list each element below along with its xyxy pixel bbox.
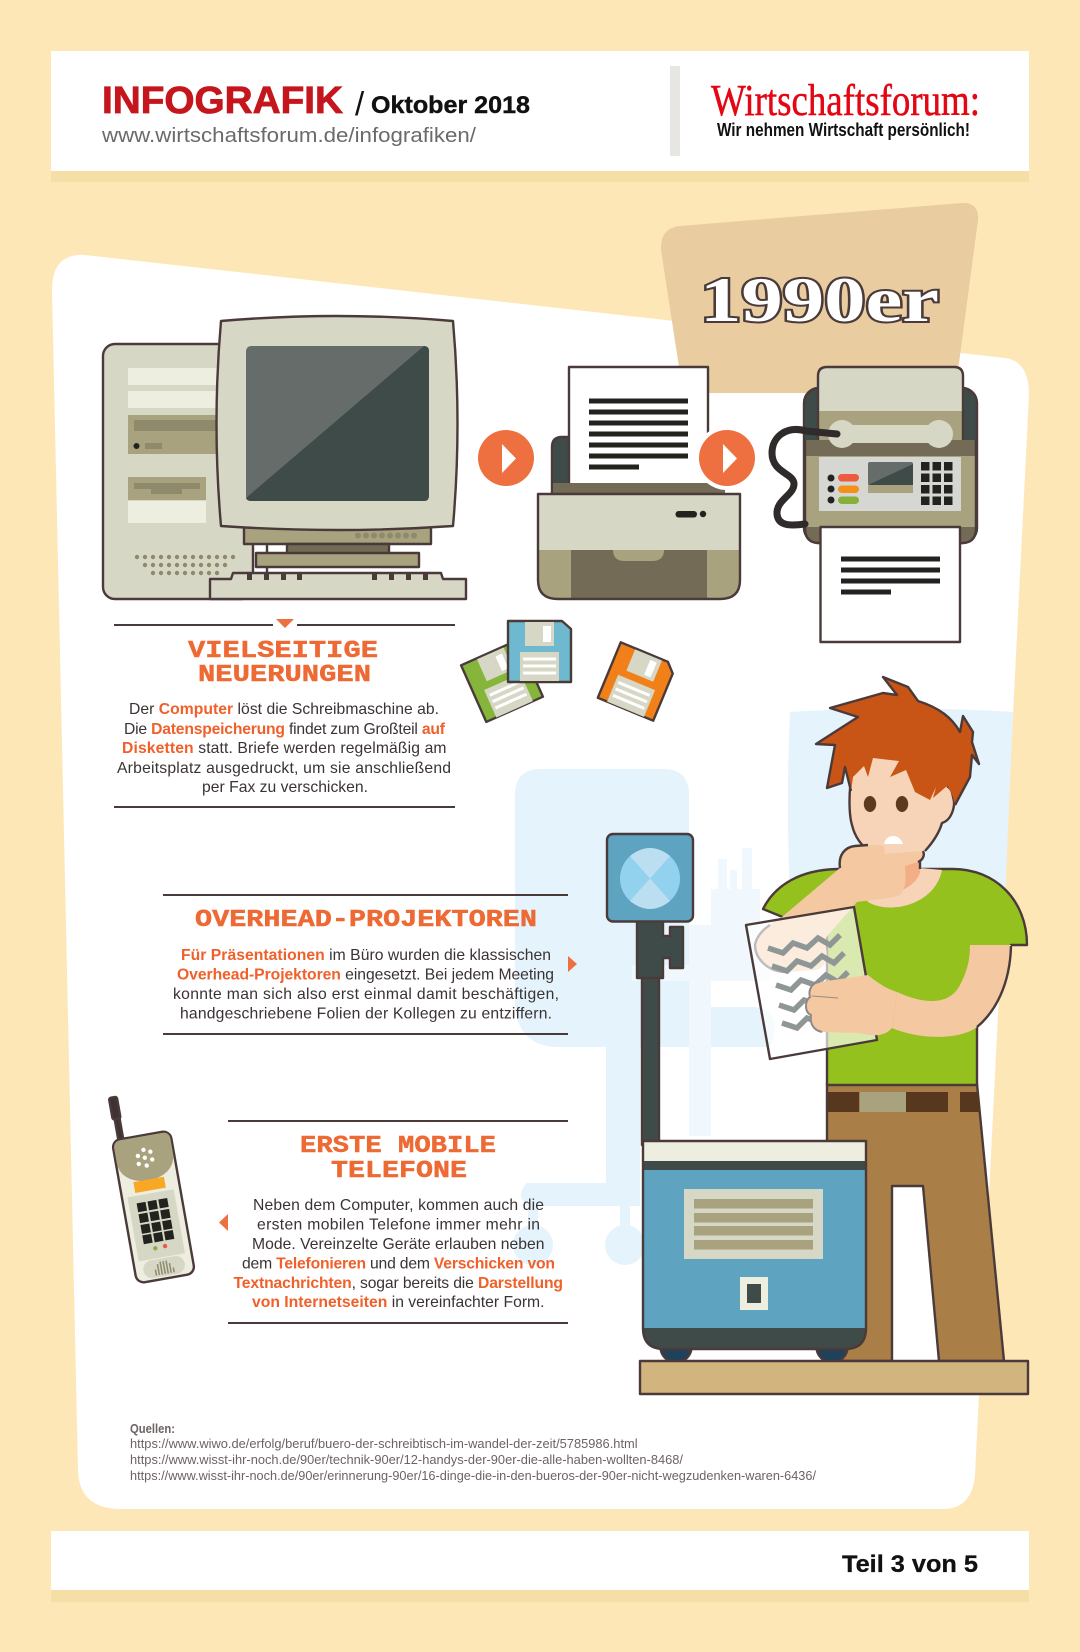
body text: von Internetseiten in vereinfachter Form. [252, 1294, 544, 1311]
head [850, 750, 954, 851]
wooden shelf [640, 1361, 1028, 1394]
era tab [661, 203, 978, 393]
arrow: computer to printer [478, 430, 534, 486]
arrow: printer to fax [695, 426, 759, 490]
overhead projector [607, 834, 866, 1362]
printer illustration [538, 367, 740, 599]
background silhouette: office chair and factory [513, 708, 1013, 1265]
heading: NEUERUNGEN [198, 662, 371, 689]
sources [130, 1421, 816, 1483]
printer body [538, 494, 740, 599]
main white panel [52, 255, 1029, 1509]
projector head [607, 834, 693, 922]
green floppy [461, 640, 543, 722]
icon: mobile phone [104, 1089, 195, 1284]
scribbles [768, 935, 848, 1028]
fax control panel [819, 457, 961, 511]
raised hand and forearm [755, 845, 924, 972]
heading: OVERHEAD-PROJEKTOREN [195, 907, 537, 934]
body text: konnte man sich also erst einmal damit beschäftigen, [173, 986, 559, 1003]
logo tagline: Wir nehmen Wirtschaft persönlich! [717, 119, 970, 140]
computer illustration [103, 316, 466, 599]
body text: per Fax zu verschicken. [202, 779, 368, 796]
heading [188, 638, 378, 689]
pointer down [276, 619, 294, 628]
heading [300, 1133, 496, 1185]
blue floppy [508, 621, 571, 682]
hand holding foil [806, 975, 897, 1035]
projector arm [637, 920, 683, 1145]
body text: Für Präsentationen im Büro wurden die klassischen [181, 947, 551, 964]
heading: VIELSEITIGE [188, 638, 378, 665]
footer banner [51, 1531, 1029, 1602]
sources: https://www.wisst-ihr-noch.de/90er/technik-90er/12-handys-der-90er-die-alle-haben-wollten-8468/ [130, 1452, 683, 1467]
orange floppy [598, 642, 676, 721]
hair [816, 677, 979, 805]
fax cover [818, 367, 963, 440]
header date slash: / [355, 85, 365, 122]
computer tower [103, 344, 253, 599]
projector vent [684, 1189, 823, 1259]
body text: Die Datenspeicherung findet zum Großteil auf [124, 721, 446, 738]
handwritten foil [746, 907, 877, 1059]
body text: Textnachrichten, sogar bereits die Darstellung [234, 1275, 563, 1292]
body text: Neben dem Computer, kommen auch die [253, 1197, 544, 1214]
body text: Overhead-Projektoren eingesetzt. Bei jedem Meeting [177, 966, 554, 984]
header banner [51, 51, 1029, 182]
section: vielseitige neuerungen [114, 619, 455, 807]
monitor [216, 316, 458, 530]
body text [173, 947, 559, 1022]
header date: Oktober 2018 [371, 92, 530, 119]
body text: Mode. Vereinzelte Geräte erlauben neben [252, 1236, 544, 1253]
heading: TELEFONE [331, 1158, 467, 1185]
mouth [884, 836, 903, 844]
monitor stand [244, 524, 431, 567]
logo wordmark: Wirtschaftsforum: [711, 76, 980, 125]
neck [855, 850, 942, 907]
body text: Der Computer löst die Schreibmaschine ab. [129, 701, 439, 718]
fax paper [820, 527, 960, 642]
era label: 1990er [700, 264, 939, 335]
body text: Disketten statt. Briefe werden regelmäßig am [122, 740, 446, 757]
fax cord [772, 430, 837, 525]
body text: handgeschriebene Folien der Kollegen zu entziffern. [180, 1006, 552, 1022]
section: overhead-projektoren [163, 895, 577, 1034]
projector cart [643, 1141, 866, 1362]
keyboard [210, 573, 466, 599]
fax handset [828, 420, 953, 448]
heading: ERSTE MOBILE [300, 1133, 496, 1160]
header title: INFOGRAFIK [102, 80, 344, 122]
shirt [763, 869, 1027, 1085]
right arm [892, 945, 1011, 1037]
printed page [569, 367, 708, 485]
projector switch [740, 1277, 768, 1310]
sources: Quellen: [130, 1421, 175, 1436]
pointer left [219, 1214, 228, 1231]
section: erste mobile telefone [219, 1121, 568, 1323]
pointer right [568, 956, 577, 972]
trousers [827, 1084, 1004, 1361]
fax illustration [772, 367, 977, 642]
body text [117, 701, 451, 796]
person with papers [746, 677, 1027, 1361]
floppy disks [461, 621, 676, 722]
body text: ersten mobilen Telefone immer mehr in [257, 1216, 540, 1234]
body text: dem Telefonieren und dem Verschicken von [242, 1256, 555, 1272]
sources: https://www.wisst-ihr-noch.de/90er/erinnerung-90er/16-dinge-die-in-den-bueros-der-90er-nicht-wegzudenken-waren-6436/ [130, 1468, 816, 1483]
eyes [864, 796, 908, 812]
page indicator: Teil 3 von 5 [842, 1551, 978, 1578]
sources: https://www.wiwo.de/erfolg/beruf/buero-der-schreibtisch-im-wandel-der-zeit/5785986.html [130, 1436, 638, 1451]
body text [234, 1197, 563, 1311]
header url: www.wirtschaftsforum.de/infografiken/ [101, 124, 476, 147]
body text: Arbeitsplatz ausgedruckt, um sie anschließend [117, 760, 451, 777]
